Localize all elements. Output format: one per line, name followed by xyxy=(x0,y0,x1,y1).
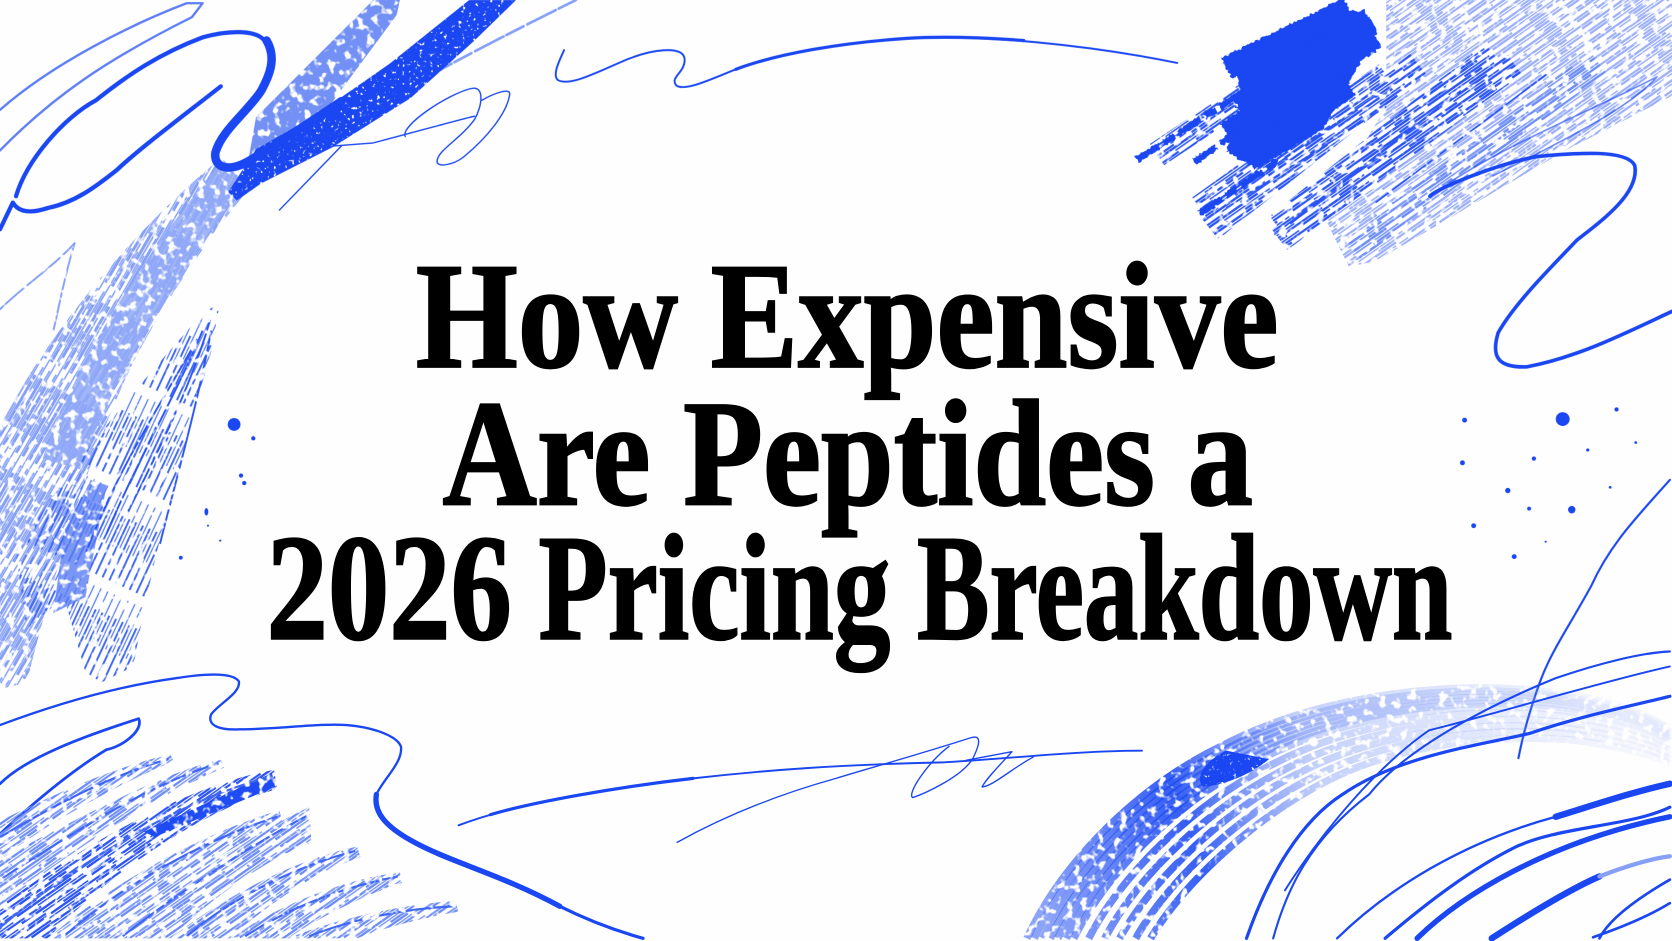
title line 2: Are Peptides a xyxy=(443,369,1253,537)
curves: bottom-right blue arcs xyxy=(1247,652,1670,938)
signature: bottom flourish xyxy=(459,737,1142,842)
title xyxy=(267,232,1452,672)
scribble: top-left pale outer loops xyxy=(0,0,576,160)
scribble: bottom-right pale arc band xyxy=(1027,688,1670,938)
scribble: bottom-right dense arc core xyxy=(1200,751,1269,787)
scribble: top-left pale sweep xyxy=(0,0,400,688)
signature: top-left thin flourish xyxy=(279,88,510,210)
curve: right blue loop xyxy=(1430,77,1672,367)
scribble: top-right far pale wash xyxy=(1322,0,1672,267)
scribble: left wedge xyxy=(0,243,220,682)
scribble: top-left dark blade xyxy=(228,0,516,200)
scribble: top-left bold looping stroke xyxy=(0,32,341,229)
signature: top wave line xyxy=(556,37,1177,87)
word: Breakdown: Breakdown xyxy=(917,504,1452,672)
splatter: left dots xyxy=(179,418,255,560)
word: Pricing: Pricing xyxy=(539,504,890,672)
title line 1: How Expensive xyxy=(416,232,1279,400)
curve: right thin descending line xyxy=(1518,480,1670,758)
curve: bottom-left small loop xyxy=(0,719,139,834)
scribble: bottom-left hatching xyxy=(0,755,459,938)
splatter: right dots xyxy=(1460,407,1637,559)
curve: bottom-left wave xyxy=(0,675,643,938)
title line 3 xyxy=(267,504,1452,672)
scribble: top-right hatch strokes xyxy=(1157,53,1599,251)
word: 2026: 2026 xyxy=(267,504,512,672)
scribble: top-right dark core xyxy=(1137,9,1378,213)
